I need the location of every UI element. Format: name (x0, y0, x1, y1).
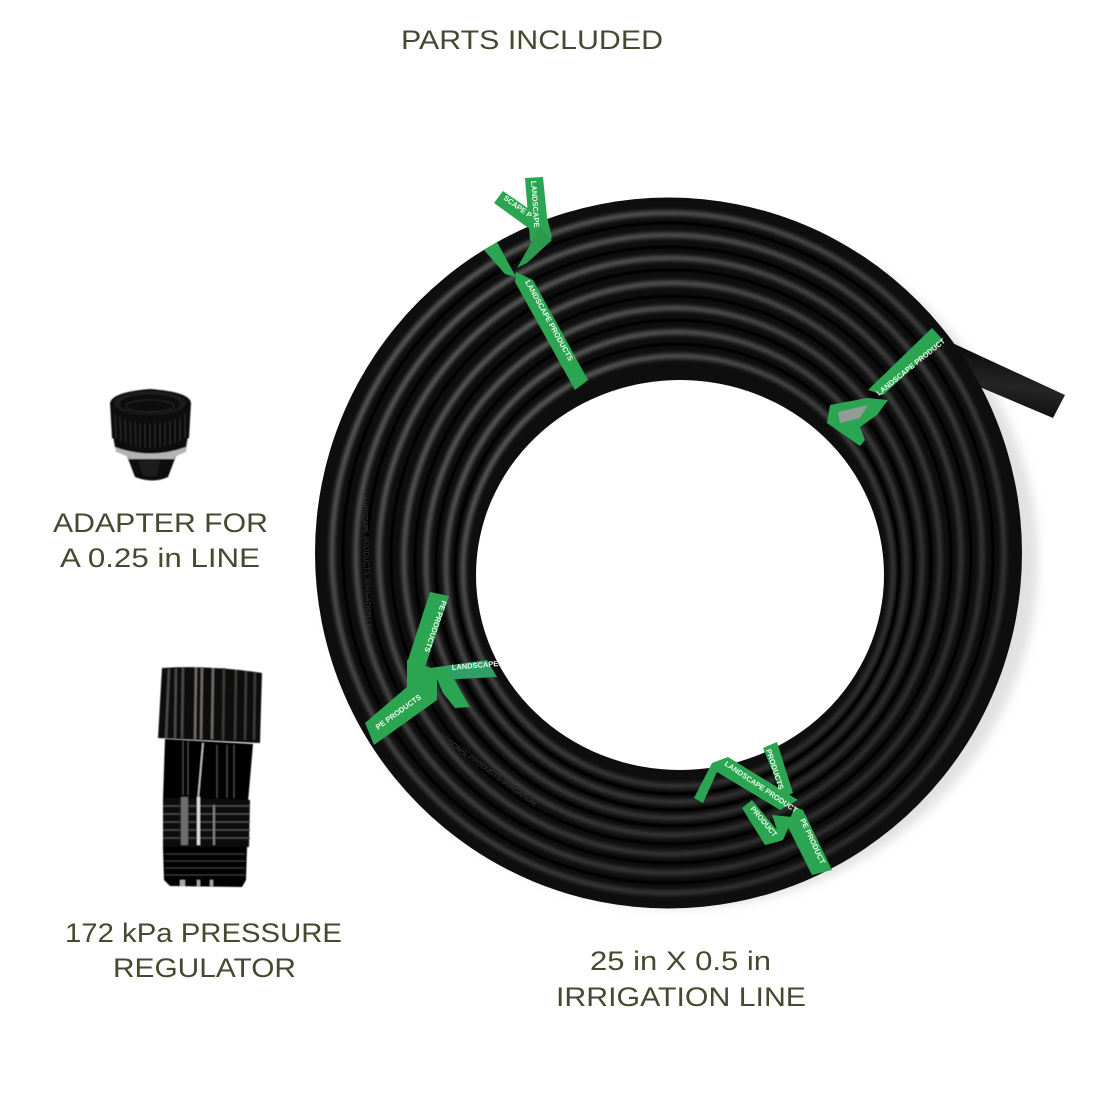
tie: lower left: PE PRODUCTS (422, 599, 449, 654)
tie: top: LANDSCAPE PRODUCTS (523, 279, 575, 362)
tie: bottom: PE PRODUCT (798, 817, 827, 866)
tie: bottom: LANDSCAPE PRODUCT (723, 759, 799, 815)
tie: lower left (365, 592, 499, 745)
irrigation line label: 25 in X 0.5 in (590, 946, 771, 976)
icon: pressure regulator (158, 667, 262, 887)
tie: bottom (694, 742, 832, 875)
tie: top: SCAPE P (502, 193, 534, 220)
tie: bottom: PRODUCT (748, 805, 779, 839)
regulator label (65, 918, 342, 983)
regulator label: REGULATOR (113, 953, 296, 983)
faint print on tube: LANDSCAPE PRODUCTS IRRIGATION LINE (360, 492, 372, 636)
title: PARTS INCLUDED (401, 25, 663, 55)
tube end (948, 341, 1065, 418)
regulator label: 172 kPa PRESSURE (65, 918, 342, 948)
tie: lower left: PE PRODUCTS (374, 692, 423, 732)
adapter label (53, 508, 268, 573)
tie: top (484, 177, 588, 390)
adapter label: ADAPTER FOR (53, 508, 268, 538)
adapter label: A 0.25 in LINE (60, 543, 260, 573)
tie: right (827, 328, 947, 446)
irrigation line coil (315, 198, 1065, 908)
icon: adapter fitting (110, 389, 191, 480)
irrigation line label: IRRIGATION LINE (556, 982, 806, 1012)
tie: bottom: PRODUCTS (764, 748, 786, 791)
tie: lower left: LANDSCAPE (451, 659, 499, 672)
irrigation line label (556, 946, 806, 1012)
tie: top: LANDSCAPE (529, 181, 541, 228)
tie: right: LANDSCAPE PRODUCT (875, 336, 947, 398)
irrigation line coil: LANDSCAPE PRODUCTS IRRIGATION (431, 728, 537, 808)
